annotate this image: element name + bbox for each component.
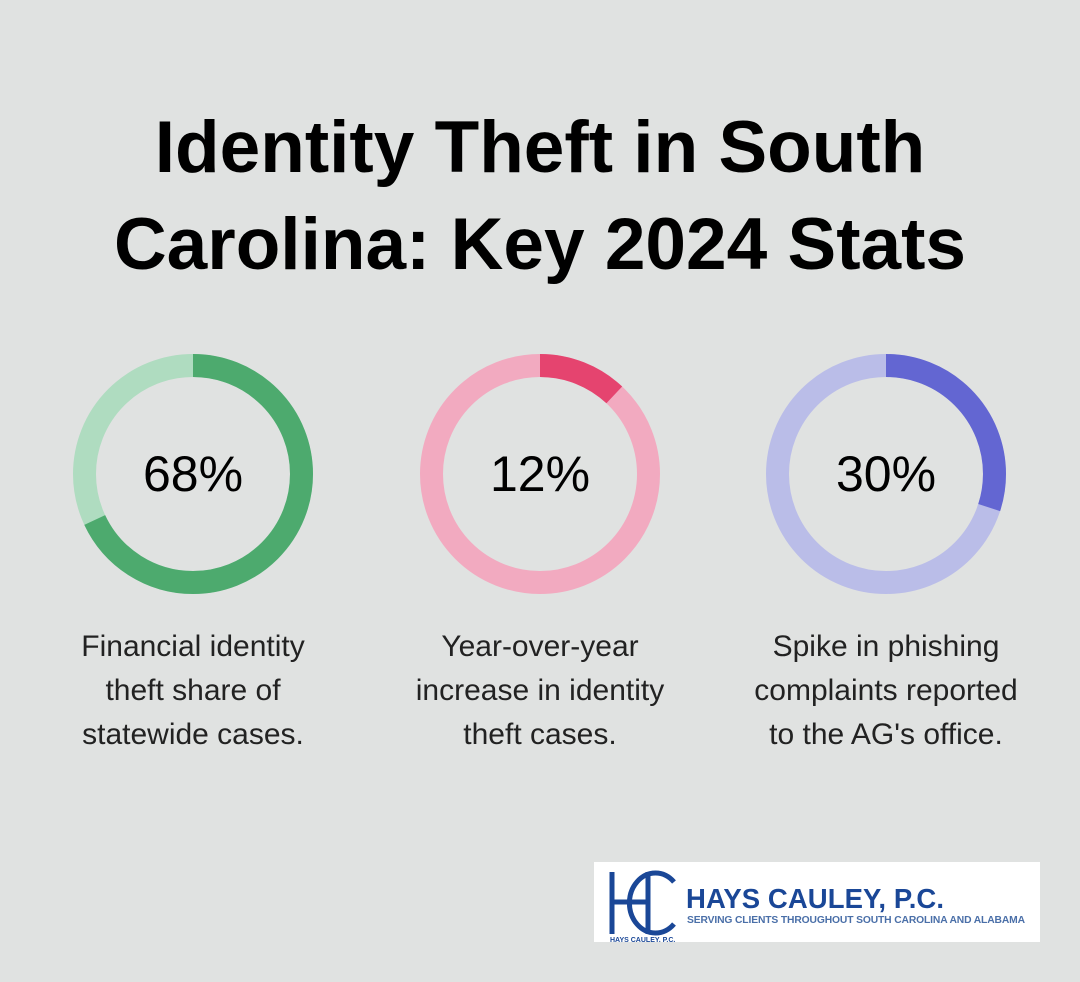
caption 3: to the AG's office. — [769, 718, 1003, 751]
caption 3: complaints reported — [754, 674, 1018, 707]
caption 1: theft share of — [105, 674, 281, 707]
caption 2: Year-over-year — [441, 630, 639, 663]
ring: 12%: 12% — [490, 446, 590, 502]
caption 1: statewide cases. — [82, 718, 304, 751]
logo: HAYS CAULEY, P.C. — [686, 883, 944, 914]
caption 2 — [416, 630, 664, 751]
ring: 30%: 30% — [836, 446, 936, 502]
ring: 12% — [420, 354, 660, 594]
title: Identity Theft in South — [155, 107, 925, 188]
title — [114, 107, 966, 285]
caption 3 — [754, 630, 1018, 751]
ring: 68%: 68% — [143, 446, 243, 502]
caption 2: increase in identity — [416, 674, 664, 707]
icon: HC monogram — [612, 872, 674, 934]
ring: 68% — [73, 354, 313, 594]
caption 3: Spike in phishing — [773, 630, 999, 663]
ring: 30% — [766, 354, 1006, 594]
logo: SERVING CLIENTS THROUGHOUT SOUTH CAROLINA AND ALABAMA — [687, 915, 1026, 926]
caption 1 — [81, 630, 305, 751]
caption 1: Financial identity — [81, 630, 305, 663]
title: Carolina: Key 2024 Stats — [114, 204, 966, 285]
caption 2: theft cases. — [463, 718, 617, 751]
logo — [594, 862, 1040, 942]
